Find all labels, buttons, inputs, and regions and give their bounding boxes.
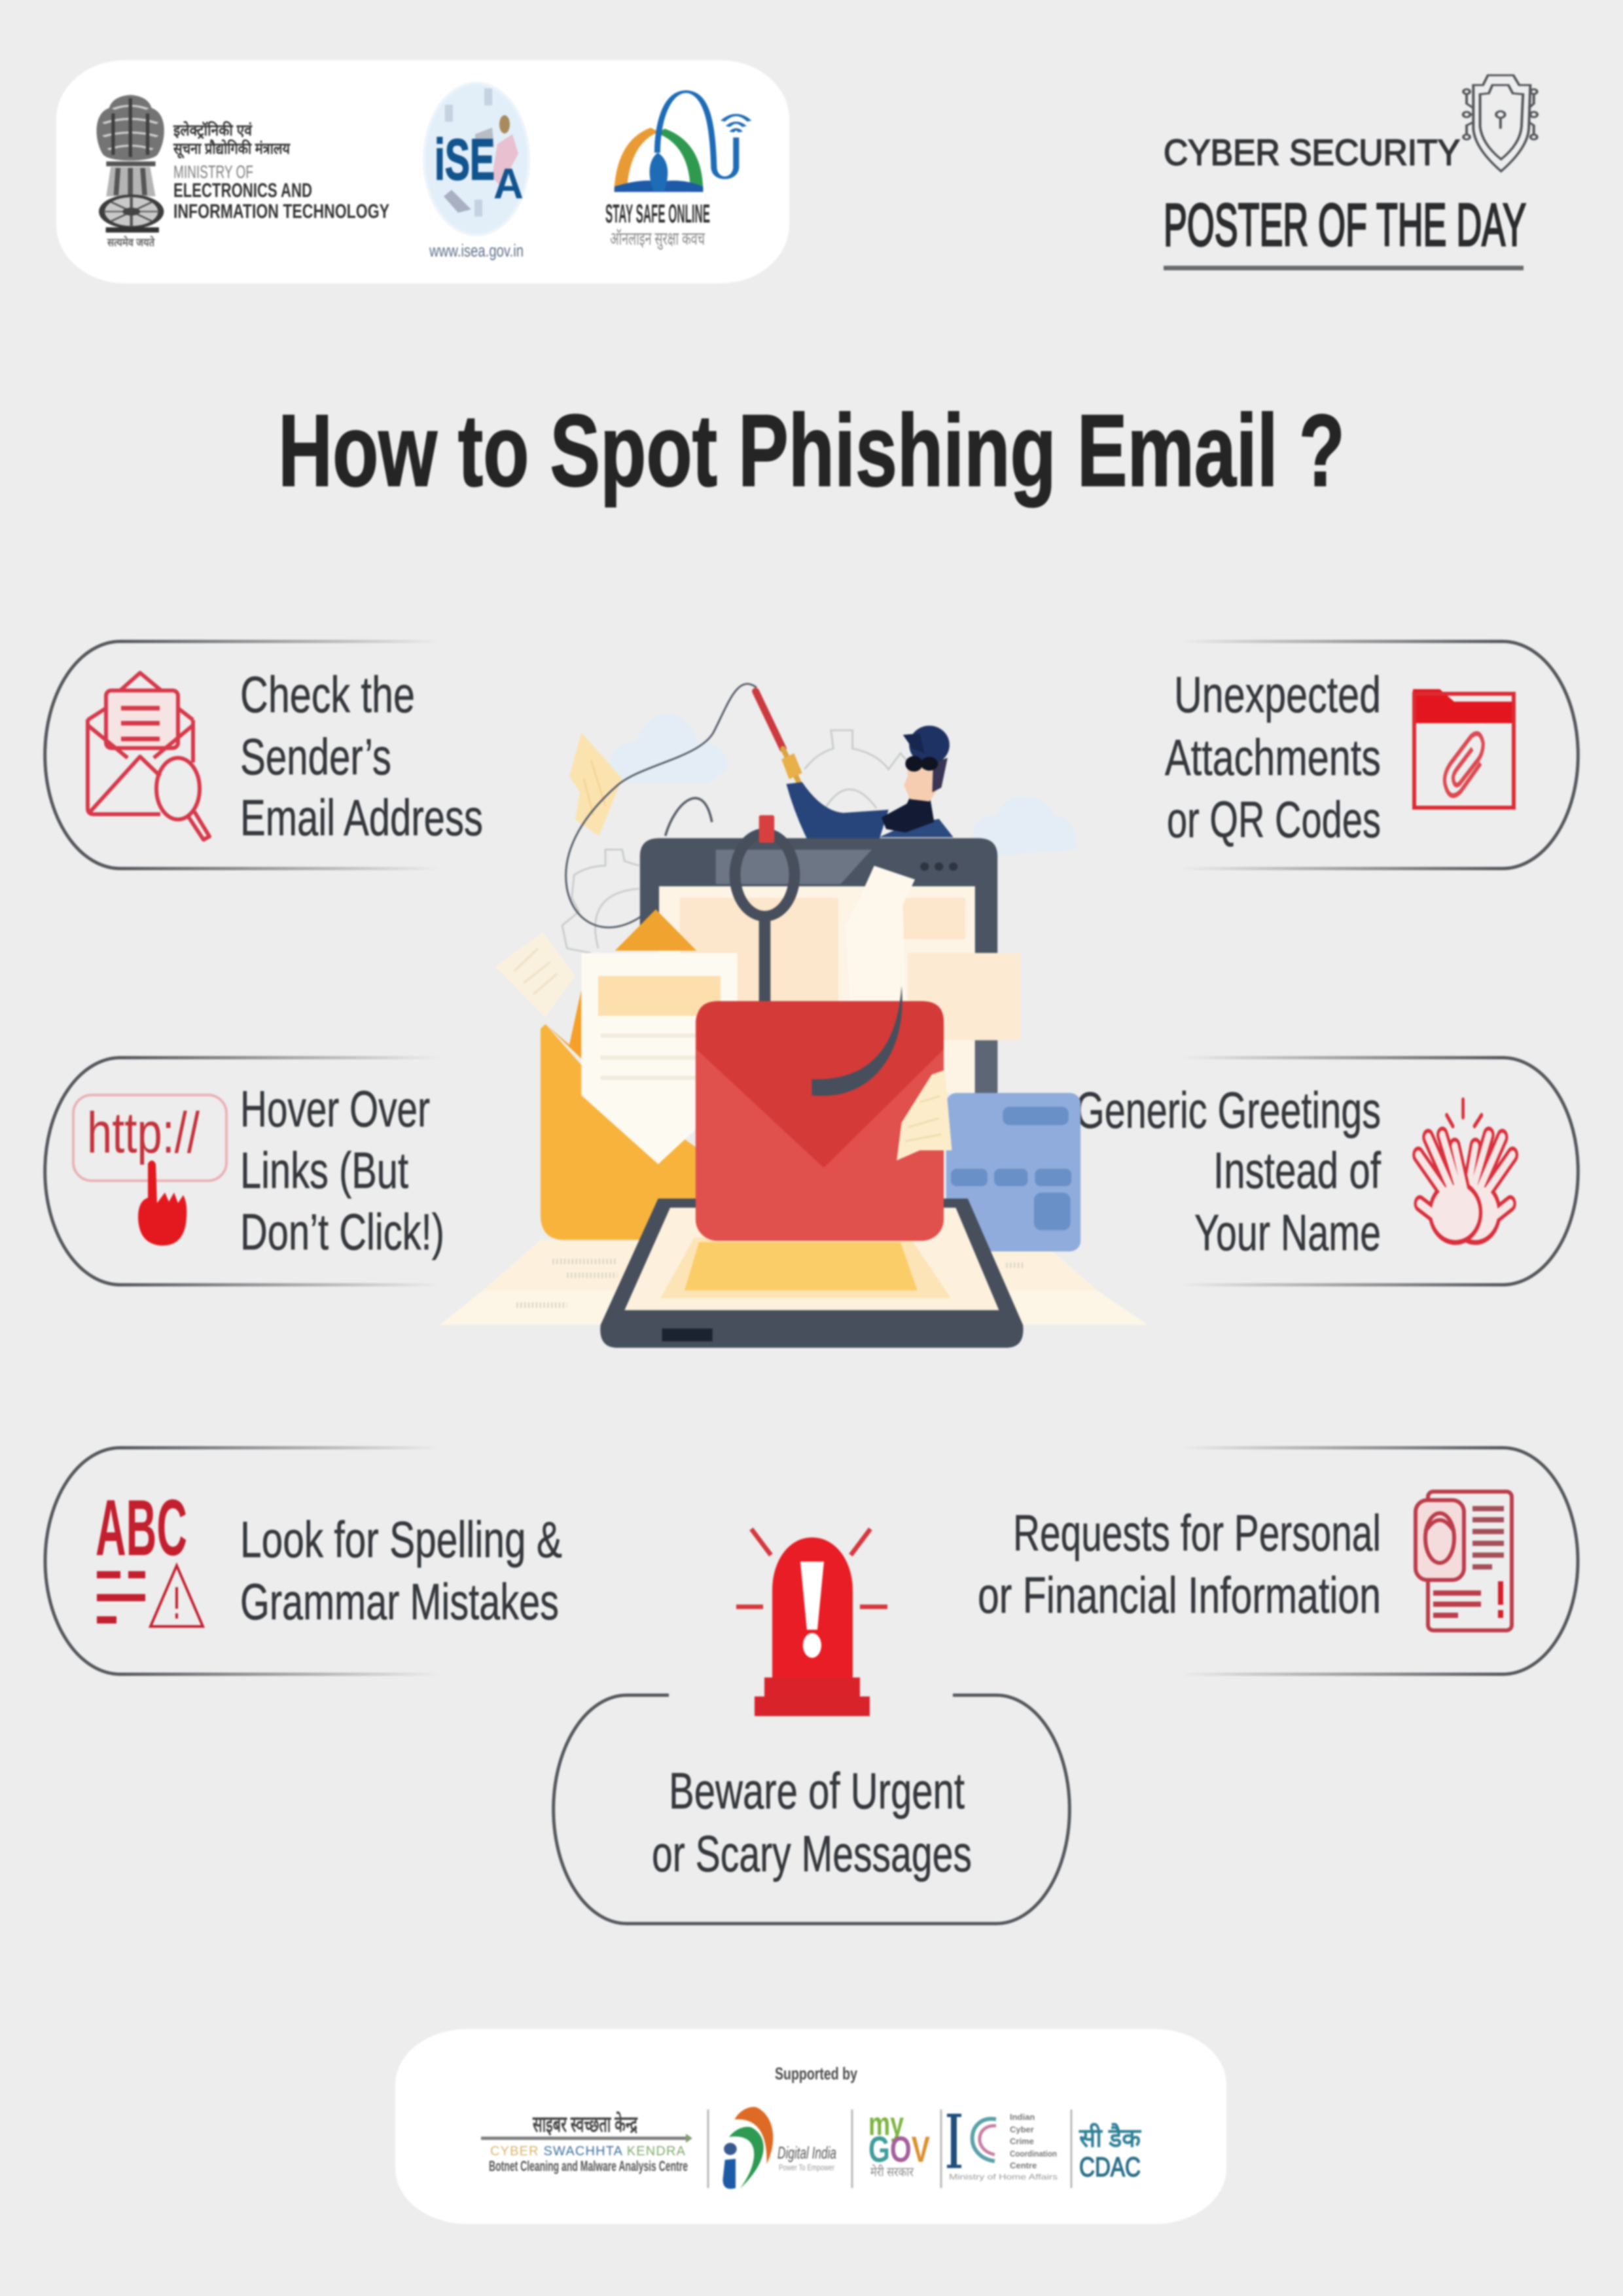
- fishing rod: [756, 691, 825, 837]
- icon: clapping hands: [1418, 1100, 1512, 1242]
- panel: unexpected attachments: [1165, 641, 1578, 869]
- text: Instead of: [1213, 1141, 1381, 1199]
- panel: beware of urgent messages: [554, 1529, 1069, 1924]
- separators: [708, 2109, 1071, 2188]
- logo: ISEA: iSE: [435, 127, 495, 192]
- red envelope: [696, 986, 952, 1241]
- keyboard base: [440, 1240, 1148, 1325]
- gears: [562, 730, 910, 953]
- tablet screen: [640, 838, 997, 1095]
- logo: Stay Safe Online: STAY SAFE ONLINE: [605, 200, 710, 228]
- logo: mygov: my: [868, 2106, 904, 2142]
- logo: ISEA: www.isea.gov.in: [429, 241, 524, 260]
- panel: generic greetings: [1075, 1058, 1578, 1285]
- panel: requests for personal information: [978, 1448, 1578, 1674]
- icon: http link with pointer: http://: [87, 1100, 200, 1165]
- text: [240, 1080, 444, 1261]
- logo: digital india: Digital India: [777, 2143, 836, 2162]
- orange envelope: [541, 909, 738, 1240]
- ministry name: इलेक्ट्रॉनिकी एवं: [173, 121, 253, 139]
- text: Email Address: [240, 789, 483, 846]
- underline: [1164, 266, 1524, 270]
- paper left: [495, 932, 575, 1017]
- icon: identity document: [1416, 1492, 1512, 1630]
- text: [240, 666, 483, 846]
- phishing hook: [735, 816, 794, 1003]
- flying papers: [569, 732, 622, 836]
- icon: http link with pointer: [73, 1095, 226, 1246]
- logo: i4c: Cyber: [1010, 2125, 1034, 2134]
- text: [1075, 1081, 1381, 1261]
- logo: Stay Safe Online: ऑनलाइन सुरक्षा कवच: [610, 228, 705, 250]
- text: or Financial Information: [978, 1566, 1381, 1624]
- info card: [908, 953, 1020, 1040]
- logo: cyber swachhta kendra: [481, 2111, 692, 2174]
- emblem motto: सत्यमेव जयते: [107, 236, 155, 249]
- heading block: cyber security poster of the day: [1164, 75, 1537, 270]
- logo: ISEA: [424, 83, 529, 260]
- central illustration: phishing hacker: [440, 684, 1148, 1348]
- text: Links (But: [240, 1141, 408, 1199]
- icon: ABC with warning: [96, 1483, 203, 1626]
- text: Hover Over: [240, 1080, 430, 1138]
- hacker: [781, 726, 954, 844]
- logo: i4c: Ministry of Home Affairs: [949, 2172, 1058, 2181]
- text: Sender’s: [240, 728, 391, 785]
- icon: national emblem: [97, 95, 164, 232]
- text: Unexpected: [1174, 666, 1381, 723]
- text: or QR Codes: [1167, 791, 1381, 848]
- text: Beware of Urgent: [669, 1762, 965, 1820]
- panel: spelling and grammar: [45, 1448, 562, 1674]
- credit card: [946, 1093, 1080, 1251]
- text: Your Name: [1194, 1204, 1381, 1261]
- text: [652, 1762, 972, 1882]
- logo: cyber swachhta kendra: साइबर स्वच्छता केन्द्र: [532, 2111, 638, 2137]
- text: Generic Greetings: [1075, 1081, 1381, 1139]
- logo: i4c: Indian: [1010, 2112, 1035, 2122]
- text: Don’t Click!): [240, 1203, 444, 1261]
- logo: i4c: Coordination: [1010, 2149, 1057, 2159]
- logo: ISEA: A: [493, 159, 524, 207]
- logo: mygov: [868, 2106, 930, 2179]
- logo: cyber swachhta kendra: CYBER SWACHHTA KENDRA: [490, 2144, 686, 2159]
- logo: cdac: CDAC: [1079, 2151, 1141, 2182]
- panel: supported by: [395, 2029, 1226, 2224]
- icon: ABC with warning: ABC: [96, 1483, 187, 1572]
- text: [240, 1511, 562, 1630]
- logo: digital india: Power To Empower: [779, 2162, 834, 2172]
- label: cyber security: CYBER SECURITY: [1164, 132, 1460, 173]
- logo: cdac: [1079, 2123, 1141, 2182]
- logo: digital india: [722, 2107, 836, 2189]
- ministry name: सूचना प्रौद्योगिकी मंत्रालय: [173, 139, 291, 159]
- supported by label: Supported by: [775, 2064, 857, 2083]
- icon: shield: [1463, 75, 1537, 171]
- text: Check the: [240, 666, 415, 723]
- ministry name: MINISTRY OF: [173, 162, 253, 182]
- logo: i4c: Crime: [1010, 2136, 1034, 2146]
- logo: cyber swachhta kendra: Botnet Cleaning and Malware Analysis Centre: [489, 2158, 688, 2174]
- logo: mygov: मेरी सरकार: [870, 2164, 914, 2179]
- panel: header logos: [56, 60, 789, 283]
- logo: mygov: GOV: [868, 2128, 930, 2170]
- text: Look for Spelling &: [240, 1511, 562, 1568]
- logo: i4c: [947, 2112, 1058, 2181]
- text: or Scary Messages: [652, 1825, 972, 1882]
- icon: folder with paperclip: [1413, 689, 1515, 808]
- logo: i4c: Centre: [1010, 2161, 1037, 2170]
- icon: alarm siren: [736, 1529, 887, 1716]
- icon: envelope with magnifier: [88, 673, 209, 840]
- clouds: [610, 713, 1076, 857]
- ministry name: [173, 121, 389, 223]
- front tablet: [600, 1198, 1023, 1348]
- panel: check the sender's email address: [45, 641, 483, 869]
- text: [978, 1504, 1381, 1624]
- ministry name: INFORMATION TECHNOLOGY: [173, 200, 389, 223]
- logo: cdac: सी डैक: [1079, 2123, 1141, 2153]
- text: Requests for Personal: [1013, 1504, 1381, 1562]
- logo: Stay Safe Online: [605, 92, 749, 250]
- ministry name: ELECTRONICS AND: [173, 179, 312, 202]
- text: [1165, 666, 1381, 848]
- text: Attachments: [1165, 728, 1381, 786]
- text: Grammar Mistakes: [240, 1573, 559, 1630]
- panel: hover over links: [45, 1058, 444, 1285]
- fishing line: [566, 684, 757, 927]
